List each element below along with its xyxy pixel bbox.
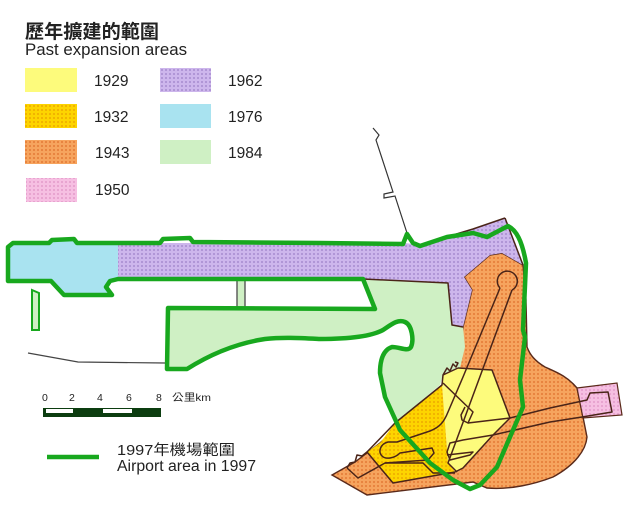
legend item: 1962 <box>160 68 262 92</box>
scale bar: 公里km <box>172 392 211 404</box>
bridge link <box>237 281 245 308</box>
legend item: 1932 <box>25 104 128 128</box>
west thin line <box>28 353 165 363</box>
legend item: 1976 <box>160 104 262 128</box>
legend: 1997 airport area: 1997年機場範圍 <box>117 441 235 459</box>
scale bar: 0 <box>42 392 48 404</box>
legend item: 1984: 1984 <box>228 145 263 162</box>
map of airport expansion <box>8 128 622 495</box>
scale bar <box>42 392 211 417</box>
legend: 1997 airport area: Airport area in 1997 <box>117 458 256 475</box>
legend item: 1984 <box>160 140 263 164</box>
legend: 1997 airport area <box>47 441 256 475</box>
legend item: 1932: 1932 <box>94 109 128 126</box>
title: 歷年擴建的範圍 <box>25 20 159 43</box>
small island <box>32 290 39 330</box>
scale bar: 2 <box>69 392 75 404</box>
legend item: 1929: 1929 <box>94 73 128 90</box>
legend item: 1943: 1943 <box>95 145 129 162</box>
legend item: 1962: 1962 <box>228 73 262 90</box>
legend item: 1929 <box>25 68 128 92</box>
area: 1976 runway extension <box>8 239 118 295</box>
area: 1932 <box>367 385 455 483</box>
area: 1943 reclamation <box>332 253 587 495</box>
north thin line <box>373 128 407 233</box>
legend item: 1976: 1976 <box>228 109 262 126</box>
scale bar: 8 <box>156 392 162 404</box>
runway outlines <box>347 218 612 483</box>
title: Past expansion areas <box>25 41 187 59</box>
area: 1950 runway extension <box>577 383 622 418</box>
1997 airport outline <box>8 226 526 489</box>
scale bar: 6 <box>126 392 132 404</box>
scale bar: 4 <box>97 392 103 404</box>
title <box>25 20 187 59</box>
legend: past expansion areas <box>25 68 263 202</box>
area: 1929 <box>442 368 510 472</box>
area: 1962 runway strip <box>118 218 523 327</box>
legend item: 1950 <box>26 178 130 202</box>
legend item: 1950: 1950 <box>95 182 130 199</box>
area: 1984 reclamation <box>167 279 465 423</box>
legend item: 1943 <box>25 140 129 164</box>
